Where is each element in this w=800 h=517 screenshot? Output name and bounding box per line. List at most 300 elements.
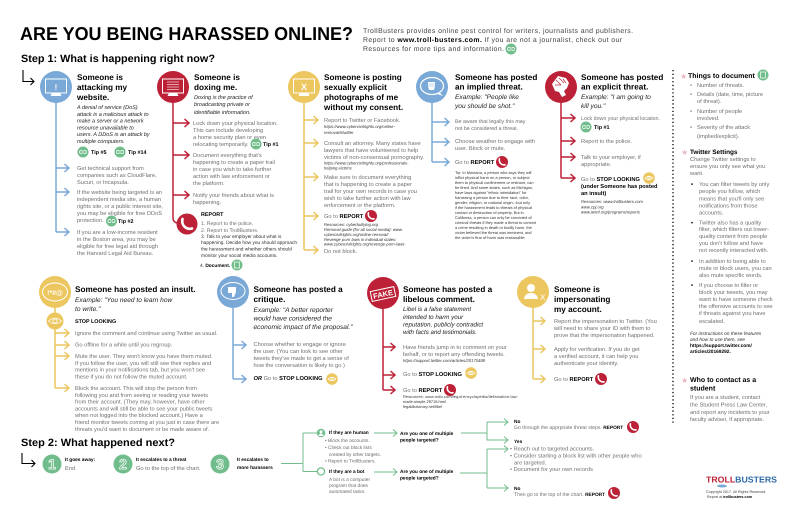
tip text: California, a person can only be convicted of [455, 215, 532, 220]
actions: relocating temporarily. [193, 141, 249, 148]
actions: Go to REPORT [554, 377, 594, 383]
actions: tweets they've made to get a sense of [254, 355, 349, 362]
actions: https://www.cybercivilrights.org/online- [324, 124, 396, 129]
intro: Change Twitter settings to [690, 156, 756, 163]
panel: explicit threat [545, 71, 663, 214]
heading: Who to contact as a [690, 376, 756, 384]
list: You can filter tweets by only [699, 181, 769, 188]
definition: Doxing is the practice of [194, 95, 253, 101]
actions: these if you do not follow the muted account. [75, 374, 188, 380]
icon: star: ★ [681, 376, 688, 385]
heading [76, 73, 127, 102]
question: bot branch: Are you one of multiple [400, 469, 454, 475]
actions [74, 330, 219, 433]
heading: attacking my [77, 83, 127, 92]
actions: Block the account. This will stop the person from [75, 385, 197, 392]
actions: Tip #2 [118, 219, 133, 225]
actions: a verified account, it can help you [554, 353, 638, 360]
tips: Tip #5 [91, 150, 106, 156]
heading: Twitter Settings [690, 149, 738, 156]
icon: fake stamp: FAKE [372, 288, 394, 301]
actions: user. Block or mute. [455, 145, 506, 152]
actions: action with law enforcement or [193, 173, 270, 180]
list: notifications from those [699, 202, 757, 210]
instructions: https://support.twitter.com/ [690, 343, 752, 349]
text: the Student Press Law Center, [690, 402, 768, 408]
actions: Go to REPORT [403, 388, 443, 394]
actions [77, 165, 163, 257]
actions: the user. (You can look to see other [254, 348, 343, 355]
flow arrows [55, 305, 69, 392]
actions: mentions in your notifications tab, but you won't see [75, 366, 205, 374]
actions: appropriate. [581, 161, 612, 168]
text: if they are a bot: automated tasks. [329, 489, 366, 495]
example: Example: "A better reporter [254, 307, 334, 314]
icon: swearing bubble: !*#@ [47, 290, 63, 297]
example: Example: "I am going to [581, 94, 651, 101]
example: would have considered the [254, 316, 332, 322]
list: the offensive accounts to see [699, 303, 773, 310]
flow arrows [533, 305, 545, 383]
tip text: Tip: In Montana, a person who says they will [455, 170, 532, 175]
actions: authenticate your identity. [554, 360, 619, 367]
actions [193, 120, 278, 206]
tip text: contact or destruction of property. But in [455, 210, 524, 215]
list: • [691, 182, 693, 188]
answer: yes [510, 439, 642, 473]
resources: www.cpj.org [581, 204, 604, 210]
heading [554, 285, 610, 314]
report steps [200, 212, 297, 270]
heading [581, 73, 663, 92]
text: and report any incidents to your [690, 409, 770, 416]
step 2 outcome 2 [114, 454, 201, 474]
list: accounts. [699, 210, 724, 216]
heading: libelous comment. [403, 295, 475, 304]
actions: Go to STOP LOOKING [581, 177, 640, 183]
list: Number of people [697, 108, 742, 115]
heading: critique. [254, 295, 285, 304]
text: if they are human: created by other targets. [329, 452, 381, 458]
logo: trollbusters [706, 474, 777, 499]
list: • [690, 92, 692, 98]
resources: Removal guide (for all social media): www. [324, 227, 403, 232]
actions: the platform. [193, 180, 225, 187]
example [581, 94, 651, 110]
heading [194, 73, 240, 92]
definition: intended to harm your [403, 314, 464, 321]
heading: Someone has posted [581, 73, 663, 82]
actions: will need to share your ID with them to [553, 325, 650, 332]
answer: yes: Yes [514, 439, 523, 445]
list: mute or block users, you can [699, 265, 772, 272]
actions: Have friends jump in to comment on your [403, 344, 507, 351]
definition [76, 105, 151, 145]
list: • [690, 83, 692, 89]
icon: monitor alert: ! [55, 83, 57, 92]
actions [403, 344, 507, 396]
actions: wish to take further action with law [323, 195, 412, 202]
title: ARE YOU BEING HARASSED ONLINE? [20, 23, 353, 44]
report steps: the harassment and whether others should [201, 246, 292, 252]
actions: how the conversation is likely to go.) [254, 362, 345, 369]
tip text: them to physical confinement or restraint, can [455, 180, 534, 185]
actions: Go to REPORT [455, 160, 495, 166]
icon: star: ★ [680, 72, 687, 81]
flow arrows [304, 100, 318, 254]
list: quality content from people [699, 233, 767, 240]
text: If you are a student, contact [690, 394, 761, 401]
icon: document [758, 70, 768, 80]
tip text: the victim's fear of harm was reasonable. [455, 235, 526, 240]
actions: removal/#twitter [324, 130, 354, 135]
definition: broadcasting private or [194, 102, 251, 108]
report steps: 2. Report to TrollBusters. [201, 228, 258, 234]
text: if they are a bot: If they are a bot [329, 469, 365, 475]
report steps: 4. Document. [200, 263, 230, 269]
actions: not be considered a threat. [455, 126, 518, 132]
actions: Get technical support from [77, 165, 144, 172]
icon: monitor with X: X [301, 82, 307, 92]
actions: Report the impersonation to Twitter. (You [554, 318, 657, 325]
list: In addition to being able to [699, 258, 766, 265]
actions: from their account. (They may, however, have other [75, 398, 205, 406]
panel: attacking my website [40, 71, 163, 257]
step 2 outcome 3 [210, 454, 273, 474]
answer: no, top of chart [514, 486, 620, 499]
flow arrows [233, 305, 246, 383]
instructions: For instructions on these features [690, 331, 762, 337]
heading [690, 376, 756, 392]
actions: happening. [193, 199, 222, 206]
actions [553, 318, 657, 385]
resources: Resources: cyberbullying.org [324, 222, 379, 227]
answer: yes: are targeted. [514, 460, 547, 466]
heading: an implied threat. [455, 82, 523, 92]
panel: critique [217, 276, 353, 385]
actions: a home security plan or even [193, 134, 266, 141]
actions [323, 117, 425, 222]
resources: Resources: www.nolo.com/legal-encyclopedia/defamation-law- [403, 394, 519, 399]
definition: A denial of service (DoS) [76, 105, 138, 111]
actions: companies such as CloudFlare, [77, 172, 157, 179]
example: to write." [75, 306, 101, 313]
actions: Tip #1 [594, 125, 609, 131]
text [690, 394, 770, 423]
definition [194, 95, 253, 116]
intro: ensure you only see what you [690, 163, 765, 170]
actions: behalf, or to report any offending tweets. [403, 351, 505, 358]
list: • [691, 283, 693, 289]
flow arrows [173, 100, 189, 223]
flow arrows [432, 100, 449, 166]
answer: no, threat steps: Go through the apprpriate threat steps. REPORT [514, 425, 623, 431]
definition: with facts and testimonials. [403, 329, 477, 336]
example [454, 94, 519, 110]
example: Example: "People like [455, 94, 519, 101]
answer: yes: • Consider starting a block list with other people who [510, 452, 642, 460]
actions: https://support.twitter.com/articles/20170488 [403, 358, 486, 363]
actions: Report to Twitter or Facebook. [324, 117, 401, 124]
actions: eligible for free legal aid through [77, 243, 158, 250]
logo: trollbusters: TROLLBUSTERS [706, 474, 777, 484]
heading: step 2: Step 2: What happened next? [21, 437, 175, 449]
icon: fist [545, 71, 577, 103]
actions: Document everything that's [193, 152, 262, 159]
panel: impersonating [517, 276, 657, 385]
heading: Someone has posted [455, 73, 537, 82]
tip text: be fined. And some states, such as Michigan, [455, 185, 533, 190]
actions: when not logged into the blocked account.) Have a [74, 412, 204, 419]
intro text: TrollBusters provides online pest control for writers, journalists and publishers. [363, 28, 633, 35]
tip text: if the harassment leads to threats of physical [455, 205, 532, 210]
actions: that is happening to create a paper [324, 181, 412, 188]
actions [455, 119, 535, 168]
list: Severity of the attack [697, 124, 750, 131]
actions: lawyers that have volunteered to help [324, 147, 418, 154]
actions: threats you'd want to document or be made aware of. [75, 426, 210, 433]
heading: sexually explicit [324, 83, 387, 92]
list: • [691, 259, 693, 265]
text: if they are a bot: A bot is a computer [329, 477, 370, 483]
icon: speech bubble with fist [416, 71, 448, 103]
list: Number of threats. [697, 82, 745, 89]
list: you don't follow and have [699, 240, 763, 247]
resources [324, 222, 405, 246]
list: Twitter also has a quality [699, 220, 761, 226]
text: if they are a bot [329, 469, 370, 495]
actions: Ignore the comment and continue using Twitter as usual. [75, 330, 218, 337]
actions: Go to STOP LOOKING [403, 372, 462, 378]
text: if they are human: • Check out block lists [325, 445, 372, 451]
intro text [363, 28, 633, 54]
actions: you may be eligible for free DDoS [77, 210, 162, 217]
list: • [690, 109, 692, 115]
heading: an explicit threat. [581, 82, 648, 92]
heading: my account. [554, 305, 602, 314]
intro text: Resources for more tips and information. [363, 46, 504, 53]
example: economic impact of the proposal." [254, 324, 353, 331]
question: human branch: people targeted? [400, 438, 439, 444]
heading [455, 73, 537, 92]
arrow: step 1 [23, 70, 34, 85]
list [691, 181, 773, 325]
actions: Choose weather to engage with [455, 138, 535, 145]
actions: enforcement or the platform. [324, 202, 396, 209]
actions: Apply for verification. If you do get [554, 346, 640, 353]
list: • [690, 125, 692, 131]
definition: make a server or a network [77, 118, 144, 124]
heading: Someone has posted a [403, 285, 493, 294]
actions: Sucuri, or Incapsula. [77, 179, 129, 186]
tips: Tip #14 [128, 150, 146, 156]
answer: yes: • Document for your own records [510, 466, 593, 473]
heading: step 1: Step 1: What is happening right now? [21, 53, 215, 65]
actions: Consult an attorney. Many states have [324, 140, 421, 147]
report steps: 1. Report to the police. [201, 221, 253, 227]
actions: prove that the impersonation happened. [554, 332, 655, 339]
definition: identifiable information. [194, 110, 251, 116]
text: if they are a bot: program that does [329, 483, 369, 489]
actions: If the website being targeted is an [77, 189, 162, 196]
flow arrows [56, 100, 69, 236]
question: human branch [400, 431, 454, 444]
logo: trollbusters: Copyright 2017. All Rights Reserved. [706, 490, 766, 494]
actions: (under Someone has posted [581, 183, 658, 190]
tip text: a crime resulting in death or bodily harm, the [455, 225, 532, 230]
intro: want. [689, 171, 704, 177]
step 2 outcome 1 [42, 454, 96, 474]
text: if they are human: • Block the accounts. [325, 438, 370, 444]
panel: libelous comment [367, 277, 519, 409]
actions: victims of non-consensual pornography. [324, 154, 425, 161]
actions: Choose whether to engage or ignore [254, 341, 346, 348]
report steps: monitor your social media accounts. [201, 253, 278, 259]
step 2 outcome 1: End [65, 465, 75, 472]
list [690, 82, 763, 140]
icon: person with x: X [540, 293, 546, 302]
actions: in case you wish to take further [193, 166, 272, 173]
actions: independent media site, a human [77, 196, 161, 203]
icon: eye [46, 312, 64, 330]
text: if they are human: • Report to TrollBusters. [325, 458, 376, 464]
icon: monitor alert [40, 71, 72, 103]
intro text: Report to www.troll-busters.com. If you are not a journalist, check out our [363, 37, 623, 44]
resources: made-simple-29718.html [403, 399, 446, 404]
definition: users. A DDoS is an attack by [77, 132, 151, 138]
answer: no, top of chart: No [514, 486, 520, 492]
definition: attack is a malicious attack to [77, 112, 149, 118]
heading: website. [76, 93, 109, 102]
actions: If you are a low-income resident [77, 229, 158, 236]
actions: Notify your friends about what is [193, 192, 274, 199]
actions: Talk to your employer, if [581, 154, 641, 161]
definition: reputation, publicly contradict [403, 322, 483, 328]
example: you should be shot." [454, 103, 515, 110]
icon: phone [176, 214, 198, 234]
tip text: victim believed the threat was imminent, and [455, 230, 532, 235]
actions [580, 116, 660, 197]
heading [254, 285, 343, 304]
flow arrows [383, 305, 395, 394]
tip text: gender, religion, or national origin—but only [455, 200, 530, 205]
report steps: 3. Talk to your employer about what is [201, 234, 282, 240]
list: not recently interacted with. [699, 247, 769, 254]
definition: resource unavailable to [77, 126, 134, 132]
heading: without my consent. [323, 103, 403, 112]
resources: www.cybercivilrights.org/revenge-porn-laws [324, 242, 405, 246]
flow arrows [561, 100, 575, 182]
list: people you follow, which [699, 188, 760, 195]
panel: who to contact [681, 376, 770, 423]
subheading: STOP LOOKING [75, 319, 116, 325]
actions: Tip #1 [263, 142, 278, 148]
example: kill you." [581, 103, 606, 110]
list: filter, which filters out lower- [699, 226, 769, 233]
resources: cybercivilrights.org/online-removal/ [324, 232, 389, 237]
actions: Make sure to document everything [324, 174, 411, 181]
actions: trail for your own records in case you [324, 188, 417, 195]
step 2 outcome 3: 3 [216, 456, 224, 472]
heading: Someone has posted an insult. [75, 285, 196, 294]
answer: no, top of chart: Then go to the top of the chart. REPORT [514, 492, 605, 498]
heading: Things to document [688, 72, 756, 80]
panel: things to document [680, 70, 768, 140]
tip text: inflict physical harm on a person, or subject [455, 175, 531, 180]
answer: no, threat steps: No [514, 419, 520, 425]
actions: the Harvard Legal Aid Bureau. [77, 250, 154, 257]
step 2 outcome 2: 2 [119, 456, 127, 472]
answer: no, threat steps [514, 419, 639, 433]
icon: thumbs down bubble [217, 276, 249, 308]
list: of threat). [697, 98, 722, 105]
logo: trollbusters: Report at trollbusters.com [707, 495, 753, 499]
tips [78, 146, 146, 158]
icon: monitor with document [157, 71, 189, 103]
actions: accounts and will still be able to see your public tweets [75, 406, 213, 412]
tip text: harassing a person due to their race, color, [455, 195, 529, 200]
example: Example: "You need to learn how [75, 297, 174, 304]
actions: in the Boston area, you may be [77, 236, 156, 243]
heading: impersonating [554, 295, 610, 304]
step 2 outcome 3: more harassers [237, 465, 273, 471]
tip text: have laws against "ethnic intimidation" for [455, 190, 527, 195]
list: if threats against you have [699, 310, 765, 317]
arrow: human answers [461, 418, 508, 444]
step 2 outcome 2: Go to the top of the chart. [136, 465, 201, 472]
actions: Report to the police. [581, 138, 632, 145]
actions [254, 341, 349, 385]
list: Details (date, time, picture [697, 91, 763, 98]
tip text: criminal threats if they made a threat to commit [455, 220, 537, 225]
panel: implied threat [416, 71, 537, 240]
list: • [691, 220, 693, 226]
actions: friend monitor tweets coming at you just in case there are [75, 419, 219, 426]
actions: helping-victims [324, 166, 353, 170]
definition [403, 306, 483, 336]
intro [689, 156, 765, 177]
icon: fake stamp [367, 277, 399, 309]
heading: student [690, 384, 716, 392]
instructions: and how to use them, see [690, 337, 745, 343]
text: faculty adviser, if appropriate. [690, 416, 764, 423]
resources: Resources: www.trollbusters.com [581, 199, 643, 204]
actions: rights site, or a public interest site, [77, 203, 163, 210]
question: bot branch: people targeted? [400, 476, 439, 482]
actions: https://www.cybercivilrights.org/professionals- [324, 160, 409, 166]
resources [403, 394, 519, 409]
list: also mute specific words. [699, 272, 763, 279]
actions: protection. [77, 217, 104, 224]
heading: doxing me. [194, 83, 237, 92]
icon: star: ★ [681, 148, 688, 157]
actions: Go offline for a while until you regroup. [75, 342, 173, 348]
question: bot branch [400, 469, 454, 482]
resources: Revenge porn laws in individual states: [324, 237, 396, 242]
panel: twitter settings [681, 148, 773, 355]
list: escalated. [699, 318, 725, 325]
instructions [690, 331, 762, 355]
note: Do not block. [324, 248, 358, 255]
actions: OR Go to STOP LOOKING [254, 376, 323, 382]
list: If you choose to filter or [699, 282, 758, 289]
list: means that you'll only see [699, 196, 764, 202]
arrow: bot to question [374, 468, 397, 476]
heading [323, 73, 403, 112]
heading: Someone has posted a [254, 285, 343, 294]
arrow: human to question [374, 430, 397, 436]
list: (implied/explicit). [697, 133, 740, 140]
